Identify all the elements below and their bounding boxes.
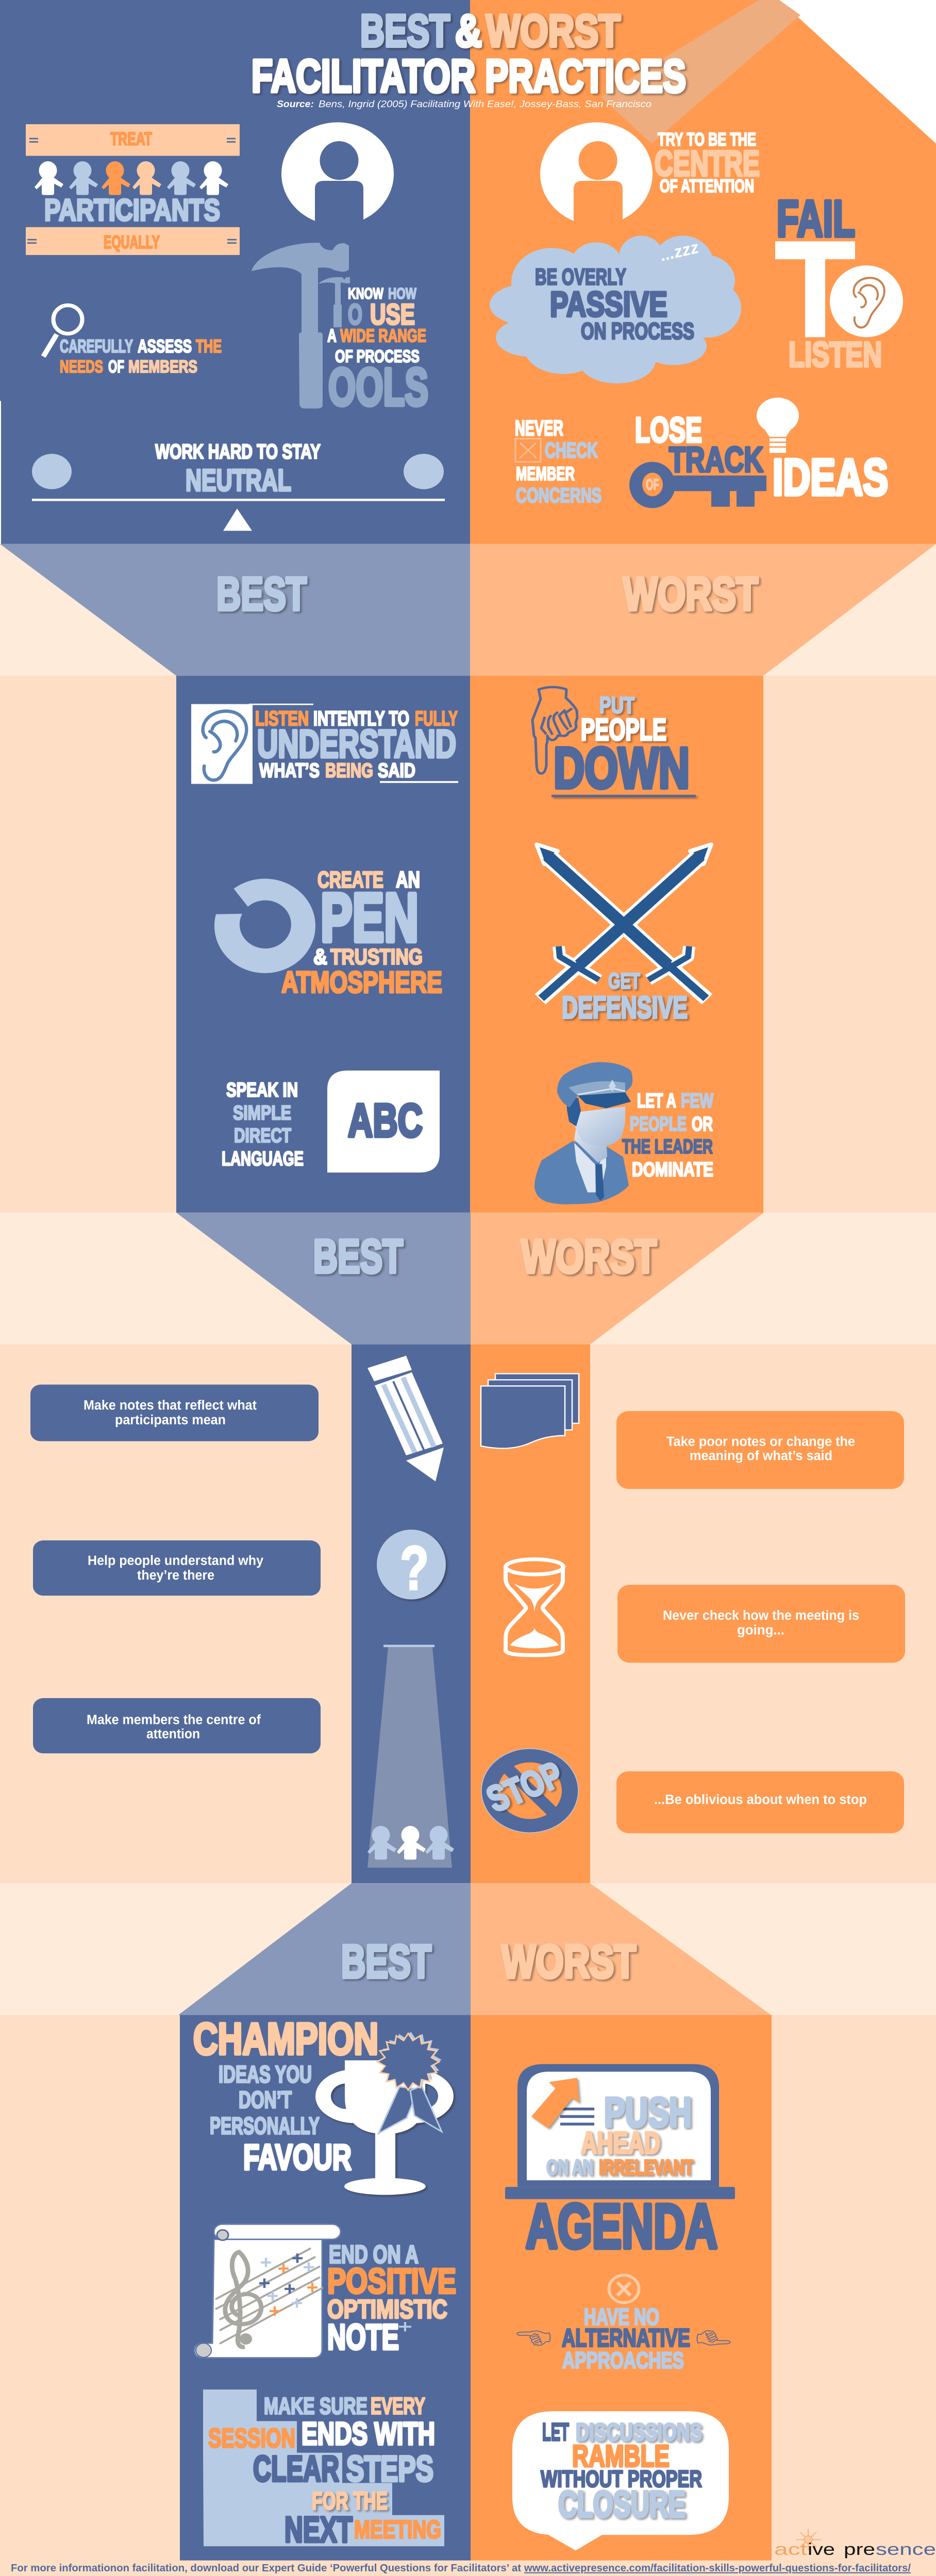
callout: poor notes: Take poor notes or change the — [666, 1434, 855, 1449]
text: try to be the centre: OF ATTENTION — [660, 176, 754, 196]
panel: section 4 worst — [471, 2015, 772, 2561]
create an open atmosphere block: AN — [396, 866, 420, 892]
have no alternative approaches block — [517, 2275, 730, 2373]
callout: oblivious — [616, 1771, 904, 1833]
officer and dominate text: FEW — [681, 1090, 713, 1112]
treat participants equally: EQUALLY — [104, 232, 160, 252]
logo: active presence: ive — [808, 2540, 835, 2558]
callout: make notes: participants mean — [115, 1413, 226, 1427]
icon: scroll with music — [194, 2224, 341, 2358]
make sure every session steps block: CLEAR — [253, 2448, 339, 2489]
make sure every session steps block: EVERY — [371, 2393, 425, 2419]
end on a positive note block: NOTE — [327, 2317, 399, 2357]
listen intently block: UNDERSTAND — [257, 722, 456, 766]
speech bubble: let discussions ramble: WITHOUT PROPER — [541, 2466, 702, 2492]
title — [252, 6, 686, 102]
stair shape — [203, 2389, 444, 2546]
panel: top left best — [0, 0, 470, 544]
funnel band 2: BEST — [313, 1230, 403, 1283]
speech bubble: let discussions ramble: RAMBLE — [572, 2439, 670, 2473]
spotlight beam — [601, 0, 800, 144]
funnel band 1 — [0, 544, 936, 676]
panel: section 3 best — [352, 1345, 471, 1883]
text: try to be the centre: TRY TO BE THE — [658, 129, 756, 149]
make sure every session steps block: MAKE SURE — [264, 2393, 367, 2419]
listen intently block: SAID — [378, 759, 415, 782]
icon: crossed circle — [609, 2275, 639, 2302]
panel: section 4 best — [180, 2015, 471, 2561]
treat participants equally — [26, 124, 240, 255]
icon: crossed checkbox — [515, 439, 541, 462]
icon: crossed swords — [537, 844, 711, 999]
icon: question mark — [377, 1530, 446, 1603]
fail to listen — [775, 190, 903, 375]
icon: hourglass — [506, 1560, 563, 1655]
make sure every session steps block: STEPS — [346, 2448, 433, 2489]
funnel band 1: BEST — [216, 568, 307, 620]
funnel band 3: BEST — [341, 1936, 431, 1988]
end on a positive note block: END ON A — [329, 2240, 419, 2268]
treat participants equally: TREAT — [110, 129, 152, 149]
panel: section 2 worst — [470, 676, 763, 1213]
icon: open ring — [214, 878, 315, 973]
officer and dominate text: THE LEADER — [622, 1136, 713, 1158]
push ahead agenda block: AHEAD — [581, 2126, 660, 2160]
push ahead agenda block: AGENDA — [526, 2192, 717, 2262]
icon: laptop — [505, 2064, 735, 2199]
logo: active presence: sence — [876, 2540, 936, 2558]
logo: active presence: act — [774, 2540, 808, 2558]
speak in simple direct language: LANGUAGE — [222, 1148, 304, 1170]
text: know how to use tools: OOLS — [328, 358, 428, 416]
fail to listen: LISTEN — [789, 335, 882, 375]
title: BEST — [360, 6, 450, 56]
equally banner — [26, 227, 240, 255]
icon: ear — [854, 278, 884, 328]
treat banner — [26, 124, 240, 156]
speech bubble: let discussions ramble — [512, 2411, 729, 2551]
text: try to be the centre — [655, 129, 760, 196]
push ahead agenda block: PUSH — [604, 2089, 692, 2136]
make sure every session steps block: NEXT — [285, 2509, 353, 2550]
get defensive block — [537, 844, 711, 1025]
callout: never check: going... — [737, 1622, 784, 1637]
text: carefully assess: CAREFULLY — [60, 336, 133, 356]
push ahead agenda block — [505, 2064, 735, 2262]
icon: stop sign — [480, 1749, 578, 1833]
end on a positive note block: OPTIMISTIC — [327, 2295, 447, 2324]
text: know how to use tools: A — [327, 326, 337, 346]
text: carefully assess: THE — [196, 336, 222, 356]
cloud: be overly passive: PASSIVE — [550, 285, 667, 324]
scale: work hard to stay neutral: NEUTRAL — [186, 464, 291, 498]
speak in simple direct language: DIRECT — [234, 1125, 291, 1147]
icon: question mark: ? — [400, 1533, 429, 1603]
callout: make members centre: Make members the centre of — [87, 1713, 261, 1727]
footer: For more informationon facilitation, download our Expert Guide ‘Powerful Questions for Facilitators’ at — [11, 2563, 521, 2574]
put people down block: DOWN — [554, 736, 690, 800]
title: WORST — [486, 6, 621, 56]
officer and dominate text: DOMINATE — [632, 1159, 713, 1181]
funnel band 3 — [0, 1883, 936, 2015]
champion ideas block: CHAMPION — [193, 2014, 378, 2064]
source line: Source: — [277, 99, 314, 110]
put people down block: PUT — [599, 692, 634, 718]
cloud: be overly passive — [490, 235, 741, 383]
lose track of ideas: OF — [646, 476, 659, 493]
champion ideas block: DON’T — [239, 2087, 292, 2113]
create an open atmosphere block: TRUSTING — [330, 944, 423, 969]
icon: trophy with rosette — [315, 2031, 454, 2195]
push ahead agenda block: IRRELEVANT — [599, 2156, 693, 2179]
funnel band 2 — [0, 1213, 936, 1345]
champion ideas block: FAVOUR — [243, 2138, 352, 2177]
funnel band 1: WORST — [623, 568, 758, 620]
icon: light bulb — [757, 398, 799, 453]
icon: person right — [540, 122, 653, 229]
end on a positive note block — [194, 2224, 456, 2358]
cloud: be overly passive: BE OVERLY — [535, 264, 626, 290]
icon: ear — [203, 711, 246, 780]
never check member concerns: MEMBER — [516, 464, 575, 485]
make sure every session steps block: FOR THE — [312, 2487, 388, 2515]
icon: row of people — [35, 161, 228, 195]
create an open atmosphere block: PEN — [321, 879, 419, 956]
icon: pencil — [367, 1356, 444, 1481]
icon: stop sign: STOP — [480, 1754, 569, 1820]
have no alternative approaches block: ALTERNATIVE — [562, 2324, 690, 2352]
champion ideas block: PERSONALLY — [210, 2113, 320, 2140]
have no alternative approaches block: APPROACHES — [562, 2347, 684, 2373]
panel: top right worst — [470, 0, 936, 544]
speak in simple direct language — [222, 1071, 440, 1173]
lose track of ideas: LOSE — [635, 411, 702, 450]
icon: magnifier — [43, 306, 82, 357]
text: carefully assess: NEEDS — [60, 357, 103, 377]
create an open atmosphere block: CREATE — [317, 866, 383, 892]
fail to listen: FAIL — [777, 190, 855, 247]
champion ideas block — [193, 2014, 454, 2195]
create an open atmosphere block — [214, 866, 442, 999]
callout: help people understand: Help people understand why — [88, 1553, 263, 1568]
end on a positive note block: POSITIVE — [327, 2262, 456, 2301]
never check member concerns: CHECK — [545, 439, 598, 463]
text: try to be the centre: CENTRE — [655, 144, 760, 183]
officer and dominate text — [534, 1062, 713, 1205]
create an open atmosphere block: & — [313, 944, 327, 969]
speech bubble: let discussions ramble: LET — [542, 2418, 569, 2446]
callout: help people understand — [33, 1540, 321, 1596]
make sure every session steps block: MEETING — [354, 2515, 441, 2544]
make sure every session steps block: ENDS WITH — [302, 2416, 435, 2452]
panel: section 2 best — [176, 676, 470, 1213]
callout: make notes: Make notes that reflect what — [83, 1398, 257, 1413]
speak in simple direct language: SIMPLE — [233, 1102, 291, 1124]
icon: hand pointing down — [532, 687, 577, 773]
white corner cut — [779, 0, 936, 144]
icon: officer — [534, 1062, 632, 1205]
icon: key — [629, 462, 766, 508]
never check member concerns: CONCERNS — [516, 484, 601, 507]
make sure every session steps block: SESSION — [208, 2423, 295, 2453]
officer and dominate text: LET A — [637, 1090, 676, 1112]
text: know how to use tools: O — [348, 298, 362, 331]
icon: person left — [281, 122, 394, 229]
icon: hammers — [252, 243, 350, 409]
text: carefully assess — [60, 336, 222, 377]
listen intently block: INTENTLY TO — [313, 707, 409, 730]
push ahead agenda block: ON AN — [546, 2156, 593, 2179]
text: know how to use tools: USE — [370, 298, 415, 331]
get defensive block: DEFENSIVE — [562, 991, 688, 1025]
abc card — [327, 1071, 440, 1173]
source line: Bens, Ingrid (2005) Facilitating With Ease!, Jossey-Bass, San Francisco — [319, 99, 651, 110]
callout: make members centre — [33, 1698, 321, 1753]
logo: active presence — [774, 2529, 936, 2558]
lose track of ideas: TRACK — [669, 440, 763, 480]
callout: never check: Never check how the meeting is — [663, 1608, 859, 1623]
get defensive block: GET — [608, 968, 640, 993]
footer — [11, 2563, 911, 2574]
callout: make notes — [30, 1384, 319, 1441]
scale: work hard to stay neutral — [32, 440, 445, 531]
speak in simple direct language: SPEAK IN — [226, 1079, 298, 1101]
callout: make members centre: attention — [146, 1726, 200, 1741]
speech bubble: let discussions ramble: CLOSURE — [558, 2483, 686, 2526]
text: know how to use tools: HOW — [388, 284, 416, 302]
panel: section 3 worst — [471, 1345, 590, 1883]
icon: hand pointing right — [697, 2331, 730, 2345]
text: carefully assess: ASSESS — [138, 336, 192, 356]
never check member concerns — [515, 417, 601, 507]
icon: sheets of paper — [481, 1374, 579, 1448]
have no alternative approaches block: HAVE NO — [584, 2304, 659, 2330]
officer and dominate text: OR — [692, 1113, 713, 1135]
champion ideas block: IDEAS YOU — [219, 2061, 312, 2088]
callout: poor notes — [616, 1411, 904, 1489]
make sure every session steps block — [203, 2389, 444, 2550]
scale: work hard to stay neutral: WORK HARD TO STAY — [155, 440, 321, 463]
text: carefully assess: MEMBERS — [128, 357, 197, 377]
title: & — [455, 6, 482, 56]
listen intently block: WHAT’S — [259, 759, 320, 782]
listen intently block: BEING — [325, 759, 373, 782]
lose track of ideas — [629, 398, 888, 508]
funnel band 2: WORST — [521, 1230, 657, 1283]
callout: poor notes: meaning of what’s said — [690, 1448, 832, 1463]
treat participants equally: PARTICIPANTS — [44, 193, 220, 227]
icon: hand pointing left — [517, 2331, 550, 2345]
create an open atmosphere block: ATMOSPHERE — [281, 965, 442, 999]
text: know how to use tools: WIDE RANGE — [340, 326, 426, 346]
cloud: be overly passive: ON PROCESS — [581, 318, 694, 345]
put people down block — [532, 687, 696, 800]
footer: www.activepresence.com/facilitation-skills-powerful-questions-for-facilitators/ — [524, 2563, 911, 2574]
callout: help people understand: they’re there — [137, 1568, 214, 1583]
icon: spotlight on members — [367, 1645, 454, 1868]
text: know how to use tools: KNOW — [348, 284, 383, 302]
callout: never check — [617, 1585, 905, 1663]
never check member concerns: NEVER — [515, 417, 563, 440]
icon: sun — [796, 2529, 821, 2550]
speak in simple direct language: ABC — [348, 1095, 423, 1147]
text: know how to use tools: OF PROCESS — [335, 346, 420, 366]
officer and dominate text: PEOPLE — [630, 1113, 687, 1135]
speech bubble: let discussions ramble: DISCUSSIONS — [576, 2418, 702, 2446]
text: know how to use tools — [327, 284, 428, 416]
put people down block: PEOPLE — [581, 713, 666, 747]
text: carefully assess: OF — [108, 357, 124, 377]
listen intently block — [191, 704, 458, 784]
title: FACILITATOR PRACTICES — [252, 50, 686, 102]
callout: oblivious: ...Be oblivious about when to stop — [654, 1792, 867, 1807]
cloud: be overly passive: ...zzz — [658, 238, 701, 265]
funnel band 3: WORST — [502, 1936, 636, 1988]
listen intently block: LISTEN — [255, 707, 309, 730]
listen intently block: FULLY — [415, 707, 458, 730]
logo: active presence: pre — [844, 2540, 875, 2558]
